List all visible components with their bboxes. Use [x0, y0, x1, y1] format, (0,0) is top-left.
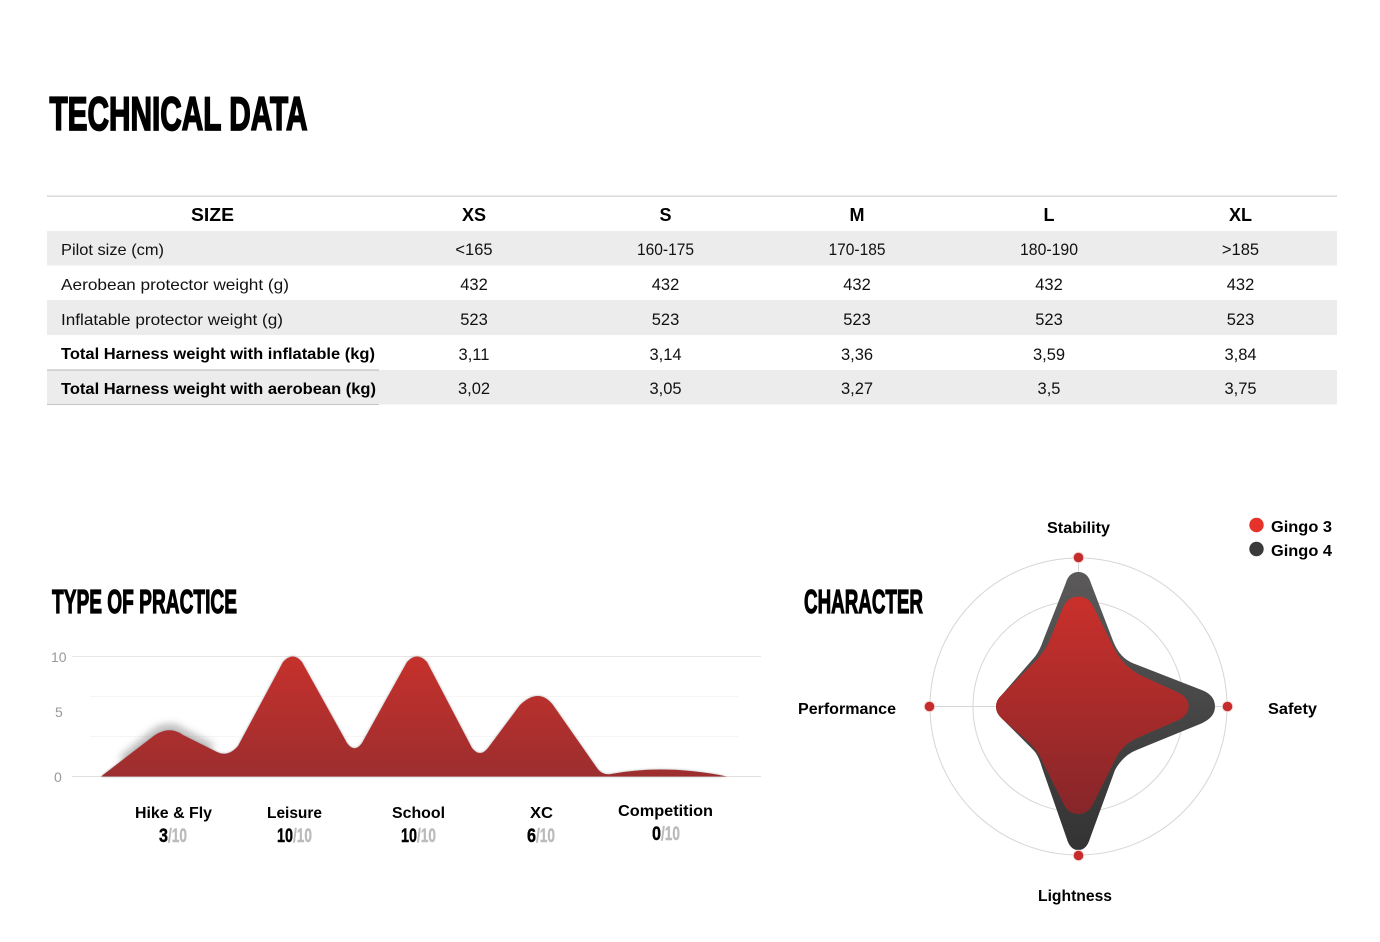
radar label: stability: Stability	[1047, 520, 1110, 537]
row: pilot size: >185	[1222, 241, 1259, 259]
table header row: XL	[1229, 205, 1252, 225]
category: school: /10	[417, 826, 436, 847]
category: competition: /10	[661, 824, 680, 845]
row: pilot size: <165	[455, 241, 493, 259]
row: total weight with aerobean: 3,5	[1038, 380, 1060, 398]
row: aerobean protector weight	[61, 276, 1254, 294]
area series	[101, 656, 727, 776]
row: inflatable protector weight	[47, 300, 1337, 335]
table header row: XS	[462, 205, 486, 225]
category: competition	[618, 803, 713, 845]
radar label: performance: Performance	[798, 701, 896, 718]
radar series: gingo 4	[996, 572, 1215, 850]
axis markers	[924, 552, 1233, 861]
title: TECHNICAL DATA	[50, 87, 308, 140]
category: hike and fly: Hike & Fly	[135, 805, 212, 822]
category: leisure: Leisure	[267, 805, 322, 822]
radar chart: character	[924, 552, 1233, 861]
row: inflatable protector weight: 523	[460, 311, 488, 329]
row: total weight with aerobean	[47, 370, 1337, 405]
legend item: gingo 4: Gingo 4	[1271, 543, 1332, 560]
row: total weight with aerobean: Total Harness weight with aerobean (kg)	[61, 381, 376, 398]
row: inflatable protector weight: 523	[843, 311, 871, 329]
y axis labels	[51, 649, 67, 785]
row: total weight with aerobean: 3,75	[1224, 380, 1257, 398]
row: total weight with inflatable: 3,11	[459, 346, 489, 364]
category: xc: /10	[536, 826, 555, 847]
category: hike and fly	[135, 805, 212, 847]
category: competition: Competition	[618, 803, 713, 820]
row: pilot size: 170-185	[828, 241, 886, 259]
row: pilot size	[47, 231, 1337, 266]
table header row: M	[850, 205, 864, 225]
row: total weight with inflatable	[61, 346, 1257, 364]
category: xc: XC	[530, 805, 553, 822]
row: total weight with aerobean: 3,02	[458, 380, 490, 398]
row: inflatable protector weight: 523	[1227, 311, 1254, 329]
y axis labels: 0	[54, 769, 62, 785]
row: inflatable protector weight: 523	[652, 311, 679, 329]
row: aerobean protector weight: 432	[843, 276, 871, 294]
category: xc: 6	[527, 826, 536, 847]
category: hike and fly: 3	[159, 826, 168, 847]
row: aerobean protector weight: Aerobean protector weight (g)	[61, 277, 289, 294]
table header row	[191, 205, 1252, 225]
row: total weight with aerobean: 3,27	[841, 380, 873, 398]
table header row: SIZE	[191, 205, 234, 225]
radar label: lightness: Lightness	[1038, 888, 1112, 905]
category: competition: 0	[652, 824, 661, 845]
row: total weight with inflatable: 3,59	[1033, 346, 1065, 364]
radar series: gingo 3	[996, 597, 1189, 814]
row: pilot size: Pilot size (cm)	[61, 242, 164, 259]
row: aerobean protector weight: 432	[460, 276, 488, 294]
category: xc	[527, 805, 555, 847]
y axis labels: 10	[51, 649, 67, 665]
row: pilot size: 160-175	[637, 241, 694, 259]
row: inflatable protector weight: 523	[1035, 311, 1063, 329]
category: leisure: /10	[293, 826, 312, 847]
heading: character: CHARACTER	[804, 583, 923, 620]
row: inflatable protector weight: Inflatable protector weight (g)	[61, 312, 283, 329]
row: pilot size: 180-190	[1020, 241, 1078, 259]
row: total weight with inflatable: 3,14	[649, 346, 682, 364]
category: school: 10	[401, 826, 417, 847]
y axis labels: 5	[55, 704, 63, 720]
row: total weight with aerobean: 3,05	[649, 380, 682, 398]
heading: type of practice: TYPE OF PRACTICE	[52, 583, 237, 620]
table: technical data	[47, 196, 1337, 405]
legend	[1249, 518, 1332, 560]
category: leisure	[267, 805, 322, 847]
row: aerobean protector weight: 432	[1227, 276, 1254, 294]
row: total weight with inflatable: 3,36	[841, 346, 873, 364]
row: total weight with inflatable: Total Harness weight with inflatable (kg)	[61, 346, 375, 363]
radar label: safety: Safety	[1268, 701, 1317, 718]
legend item: gingo 3: Gingo 3	[1271, 519, 1332, 536]
category: leisure: 10	[277, 826, 293, 847]
row: total weight with inflatable: 3,84	[1224, 346, 1257, 364]
area chart: type of practice	[51, 649, 761, 785]
category: school	[392, 805, 445, 847]
row: aerobean protector weight: 432	[1035, 276, 1063, 294]
category: school: School	[392, 805, 445, 822]
row: aerobean protector weight: 432	[652, 276, 679, 294]
category: hike and fly: /10	[168, 826, 187, 847]
table header row: S	[659, 205, 672, 225]
table header row: L	[1044, 205, 1054, 225]
